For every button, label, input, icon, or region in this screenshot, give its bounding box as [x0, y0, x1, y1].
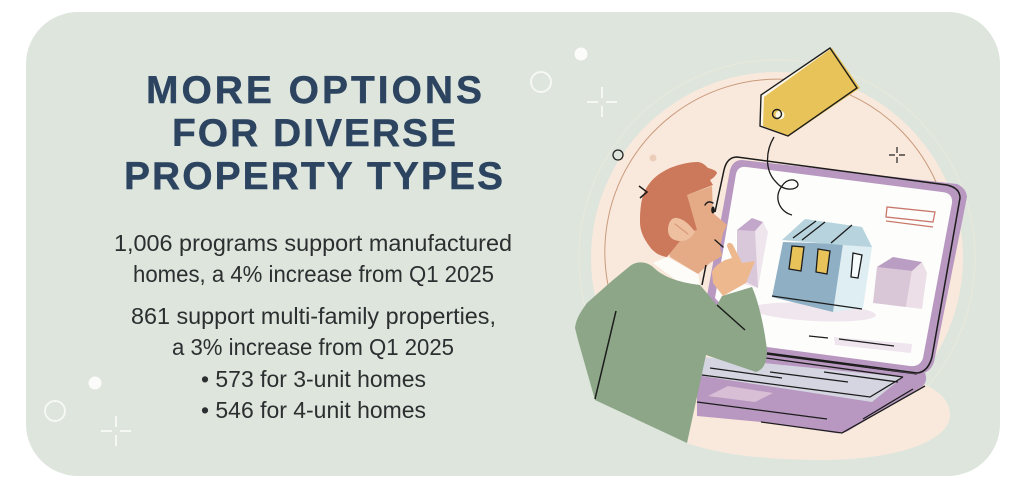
text block: statistics: • 573 for 3-unit homes	[201, 366, 426, 392]
keyboard	[702, 357, 903, 402]
text block: statistics	[114, 230, 512, 423]
man	[575, 162, 767, 443]
sweater	[575, 262, 767, 443]
decorative sparkles: bottom	[45, 376, 131, 446]
screen caption lines	[809, 336, 912, 353]
ear	[668, 218, 695, 241]
main house	[772, 219, 872, 312]
text block: statistics: 861 support multi-family properties,	[131, 303, 496, 329]
small accents	[613, 147, 905, 163]
hair accent	[639, 186, 647, 198]
title: PROPERTY TYPES	[124, 155, 503, 198]
laptop	[697, 157, 967, 433]
laptop outline	[715, 157, 960, 373]
hand	[712, 243, 755, 296]
collar	[653, 257, 700, 285]
text block: statistics: 1,006 programs support manufactured	[114, 230, 512, 256]
laptop base	[697, 347, 926, 433]
hair	[640, 162, 717, 257]
red label box	[886, 207, 935, 227]
title	[124, 69, 503, 198]
title: FOR DIVERSE	[172, 112, 456, 155]
ear line, eye and mouth	[675, 202, 723, 247]
text block: statistics: homes, a 4% increase from Q1 2025	[133, 261, 494, 287]
laptop base lines	[697, 354, 925, 433]
illustration background circles	[579, 60, 975, 460]
decorative sparkles: top	[531, 48, 617, 117]
neck and face	[660, 186, 727, 274]
house shadow	[752, 300, 876, 324]
trackpad	[708, 386, 773, 402]
text block: statistics: • 546 for 4-unit homes	[201, 397, 426, 423]
title: MORE OPTIONS	[146, 69, 482, 112]
sweater lines	[595, 265, 745, 399]
laptop screen frame	[707, 160, 967, 374]
price tag	[760, 48, 860, 215]
screen	[715, 167, 952, 366]
text block: statistics: a 3% increase from Q1 2025	[172, 334, 454, 360]
small house left	[737, 218, 768, 288]
small house right	[873, 257, 927, 309]
